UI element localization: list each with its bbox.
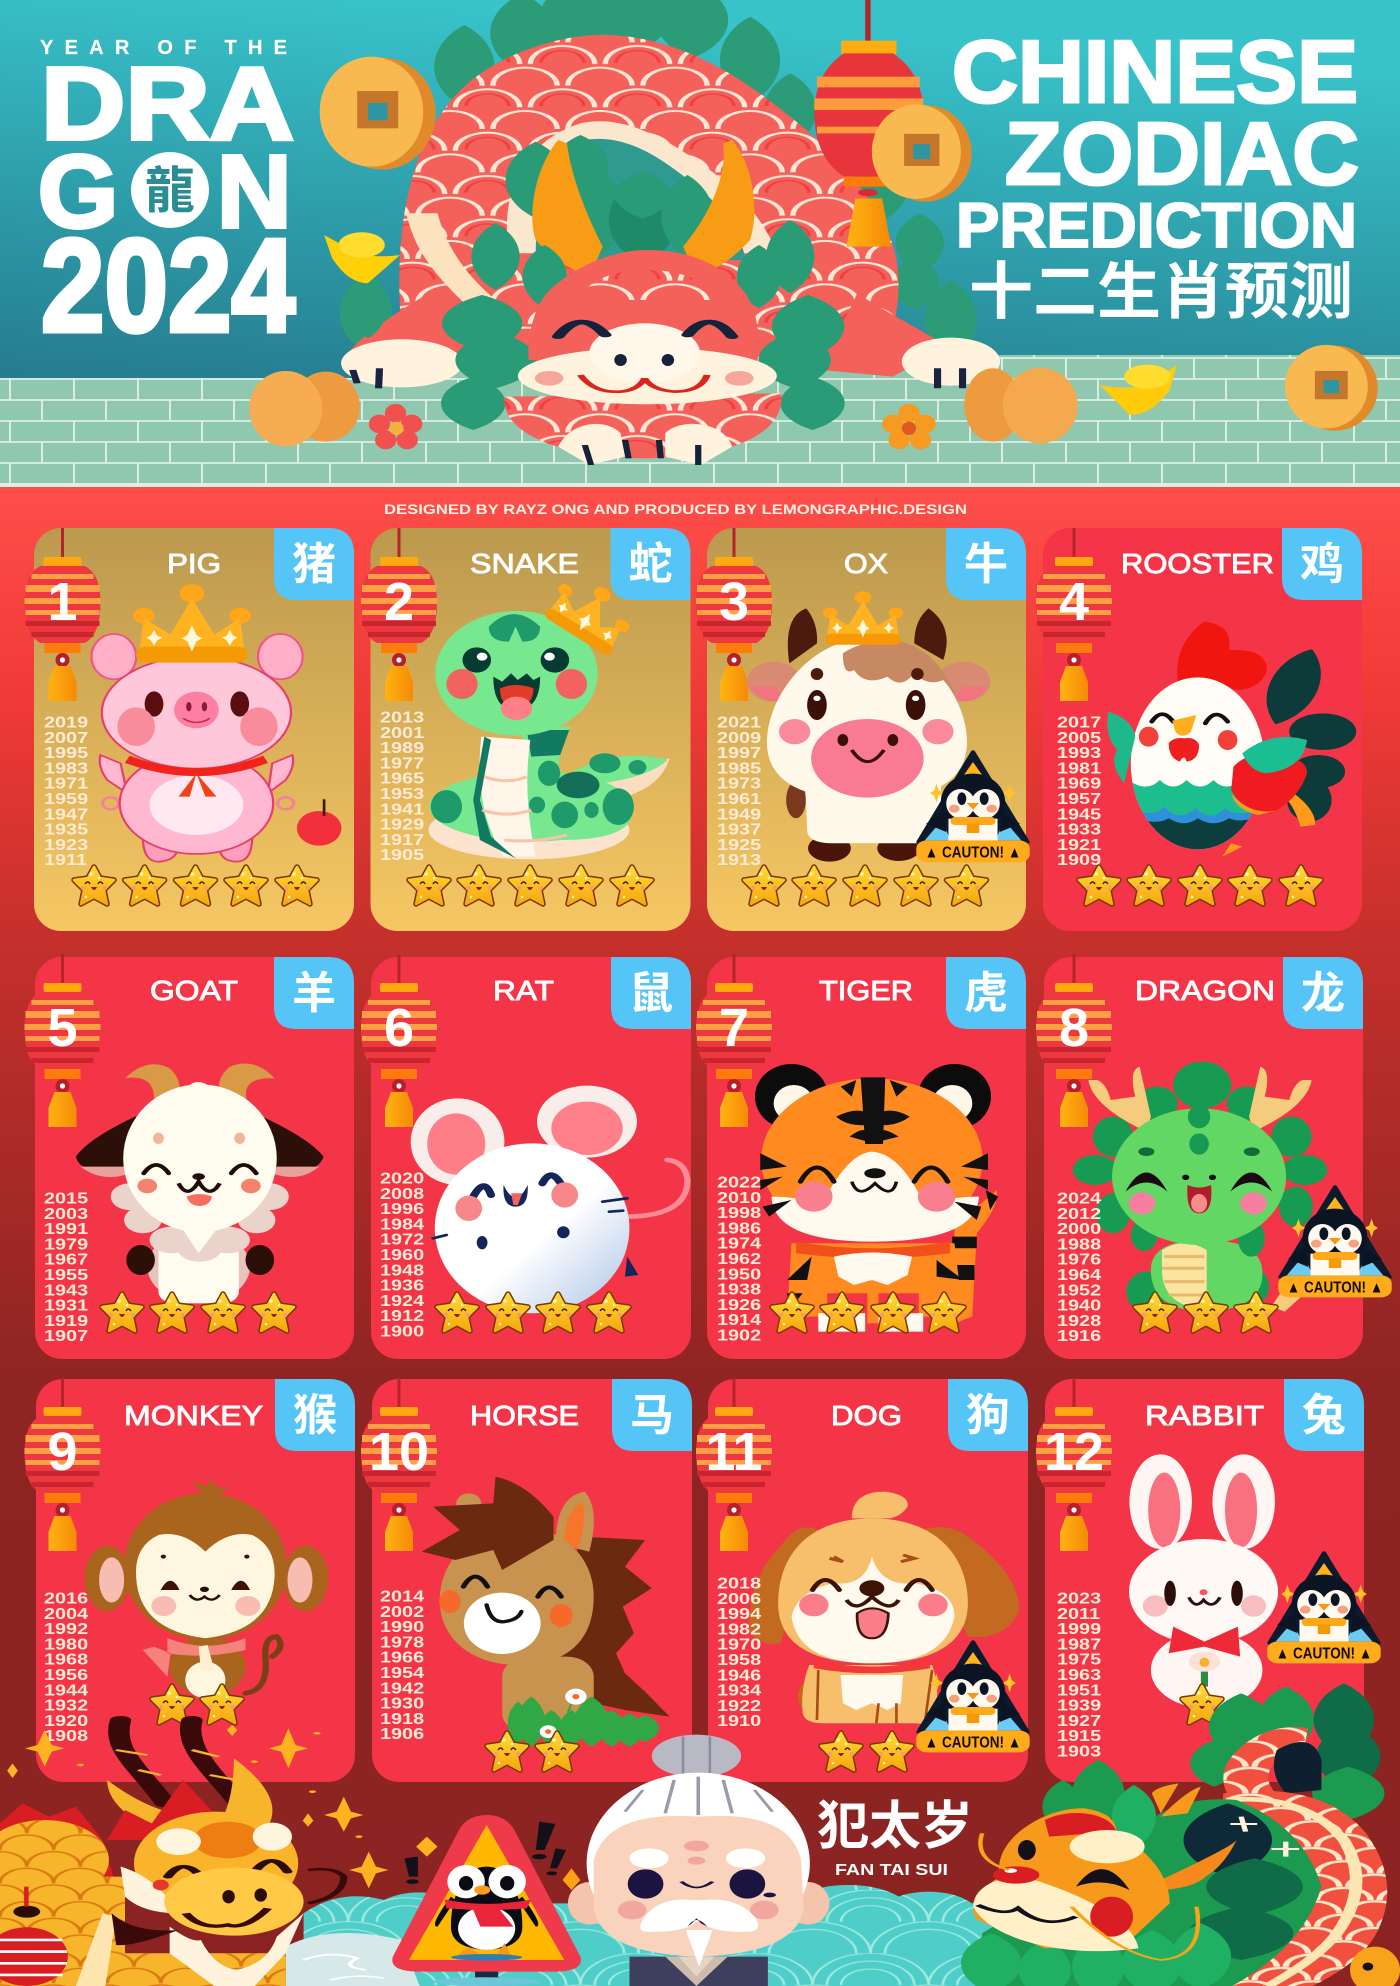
years list: 1981 bbox=[1057, 759, 1101, 777]
years list: 1911 bbox=[44, 851, 87, 869]
score stars: two bbox=[152, 1686, 242, 1723]
years list: 1908 bbox=[44, 1727, 88, 1745]
panel: card 6 rat bbox=[361, 954, 691, 1359]
years list: 1952 bbox=[1057, 1281, 1101, 1299]
years list: 1950 bbox=[717, 1265, 761, 1283]
years list: 2007 bbox=[44, 729, 88, 746]
years list: 1961 bbox=[717, 790, 761, 807]
lantern number 3: 3 bbox=[719, 572, 749, 632]
panel: card 8 dragon: 龙 bbox=[1301, 957, 1345, 1021]
panel: card 9 monkey bbox=[24, 1378, 355, 1782]
lantern number 8 bbox=[1036, 954, 1112, 1127]
years list: 1992 bbox=[44, 1620, 88, 1638]
lantern number 5: 5 bbox=[47, 998, 78, 1058]
years list: 1974 bbox=[717, 1235, 761, 1252]
icon: oranges right bbox=[964, 368, 1078, 443]
years list: 1914 bbox=[717, 1311, 761, 1329]
years list: 1969 bbox=[1057, 775, 1101, 792]
panel: card 7 tiger: TIGER bbox=[819, 975, 913, 1006]
panel: card 1 pig: PIG bbox=[167, 548, 221, 579]
icon: gold coin lower right bbox=[1285, 345, 1378, 431]
years list: 1948 bbox=[380, 1261, 424, 1279]
years list: 1947 bbox=[44, 805, 88, 823]
credit line: DESIGNED BY RAYZ ONG AND PRODUCED BY LEMONGRAPHIC.DESIGN bbox=[384, 502, 967, 517]
panel: card 6 rat: RAT bbox=[493, 975, 554, 1006]
years list: 1907 bbox=[44, 1327, 88, 1345]
dragon arched body bbox=[399, 35, 899, 367]
lantern number 2: 2 bbox=[384, 572, 414, 632]
horns bbox=[532, 140, 754, 277]
score stars: five bbox=[1079, 867, 1321, 904]
label: fan tai sui: FAN TAI SUI bbox=[835, 1862, 948, 1879]
years list: 1994 bbox=[717, 1605, 761, 1623]
panel: card 7 tiger bbox=[696, 954, 1026, 1359]
years list: 1945 bbox=[1057, 805, 1101, 823]
years list: 1966 bbox=[380, 1649, 424, 1666]
panel: card 1 pig bbox=[24, 528, 354, 931]
title: year of the dragon 2024: G bbox=[38, 134, 118, 249]
title: chinese zodiac prediction: ZODIAC bbox=[1005, 104, 1359, 203]
years list: 2004 bbox=[44, 1605, 88, 1622]
years list: 2019 bbox=[44, 714, 88, 731]
panel: card 10 horse bbox=[361, 1378, 692, 1782]
years list: 2006 bbox=[717, 1590, 761, 1607]
sparkles bbox=[7, 1725, 438, 1888]
years list: 1989 bbox=[380, 739, 424, 757]
years list: 1998 bbox=[717, 1204, 761, 1222]
panel: card 9 monkey: 猴 bbox=[293, 1379, 337, 1443]
years list: 2010 bbox=[717, 1189, 761, 1206]
years list: 1972 bbox=[380, 1231, 424, 1248]
years list: 1986 bbox=[717, 1219, 761, 1237]
years list: 1999 bbox=[1057, 1620, 1101, 1638]
panel: card 3 ox: 牛 bbox=[964, 528, 1008, 592]
years list: 1903 bbox=[1057, 1743, 1101, 1760]
years list: 1960 bbox=[380, 1246, 424, 1263]
years list: 1910 bbox=[717, 1712, 761, 1730]
years list: 1988 bbox=[1057, 1235, 1101, 1253]
years list: 1921 bbox=[1057, 836, 1101, 853]
years list: 2013 bbox=[380, 709, 424, 726]
years list: 1962 bbox=[717, 1250, 761, 1267]
years list: 1928 bbox=[1057, 1312, 1101, 1329]
icon: oranges left bbox=[249, 371, 360, 446]
title: year of the dragon 2024: 2024 bbox=[41, 212, 295, 359]
head leaves bbox=[441, 220, 845, 430]
score stars: four bbox=[772, 1294, 964, 1331]
years list: 1930 bbox=[380, 1695, 424, 1712]
years list: 1949 bbox=[717, 805, 761, 823]
panel: card 3 ox: OX bbox=[844, 548, 888, 579]
years list: 1982 bbox=[717, 1620, 761, 1638]
icon: penguin warning sign bbox=[392, 1815, 581, 1986]
icon: dragon character coin: 龍 bbox=[145, 151, 195, 223]
years list: 1995 bbox=[44, 744, 88, 762]
illustration: old man bbox=[568, 1735, 830, 1986]
years list: 1968 bbox=[44, 1651, 88, 1668]
years list: 1954 bbox=[380, 1664, 424, 1681]
years list: 1944 bbox=[44, 1681, 88, 1699]
title: chinese zodiac prediction: 十二生肖预测 bbox=[969, 241, 1353, 331]
panel: card 5 goat bbox=[24, 954, 354, 1359]
icon: snake crown bbox=[541, 567, 641, 658]
years list: 2005 bbox=[1057, 729, 1101, 746]
years list: 1973 bbox=[717, 775, 761, 792]
lantern number 1 bbox=[24, 528, 100, 701]
years list: 1905 bbox=[380, 846, 424, 864]
years list: 2021 bbox=[717, 714, 761, 731]
illustration: ox bbox=[747, 591, 990, 862]
years list: 1939 bbox=[1057, 1697, 1101, 1714]
icon: penguin caution badge: ▲ CAUTON! ▲ bbox=[925, 844, 1021, 862]
years list: 1906 bbox=[380, 1725, 424, 1743]
years list: 1932 bbox=[44, 1697, 88, 1714]
years list: 1915 bbox=[1057, 1727, 1101, 1745]
years list: 1971 bbox=[44, 775, 88, 792]
years list: 1976 bbox=[1057, 1251, 1101, 1268]
panel: card 4 rooster bbox=[1036, 528, 1362, 931]
lantern number 4: 4 bbox=[1059, 572, 1089, 632]
icon: gold ingot right bbox=[1100, 365, 1177, 415]
title: year of the dragon 2024 bbox=[38, 37, 295, 359]
years list: 2024 bbox=[1057, 1190, 1101, 1207]
panel: bottom scene fan tai sui bbox=[0, 1683, 1400, 1986]
years list: 2023 bbox=[1057, 1590, 1101, 1607]
years list: 2022 bbox=[717, 1174, 761, 1191]
panel: card 1 pig: 猪 bbox=[292, 528, 336, 592]
dragon head bbox=[504, 250, 782, 465]
illustration: rat bbox=[411, 1086, 687, 1313]
years list: 1983 bbox=[44, 759, 88, 777]
years list: 1985 bbox=[717, 759, 761, 777]
score stars: four bbox=[102, 1294, 294, 1331]
title: year of the dragon 2024: YEAR OF THE bbox=[40, 37, 287, 59]
years list: 1953 bbox=[380, 785, 424, 802]
panel: card 8 dragon: DRAGON bbox=[1135, 975, 1275, 1006]
years list: 2000 bbox=[1057, 1220, 1101, 1238]
years list: 1926 bbox=[717, 1296, 761, 1313]
icon: gold coin upper left bbox=[320, 57, 436, 170]
score stars: four bbox=[437, 1294, 629, 1331]
centre leaves bbox=[506, 135, 714, 265]
lantern number 10: 10 bbox=[369, 1422, 429, 1482]
lantern number 7: 7 bbox=[719, 998, 749, 1058]
years list: 1970 bbox=[717, 1636, 761, 1653]
years list: 2015 bbox=[44, 1190, 88, 1207]
panel: card 5 goat: 羊 bbox=[292, 957, 336, 1021]
score stars: two bbox=[487, 1733, 577, 1770]
panel: card 2 snake: 蛇 bbox=[628, 528, 672, 592]
panel: header banner bbox=[0, 0, 1400, 487]
years list: 1940 bbox=[1057, 1297, 1101, 1314]
lantern number 2 bbox=[361, 528, 437, 701]
years list: 1902 bbox=[717, 1327, 761, 1344]
panel: card 5 goat: GOAT bbox=[150, 975, 238, 1006]
panel: card 8 dragon bbox=[1036, 954, 1392, 1359]
lantern number 1: 1 bbox=[47, 572, 78, 632]
title: chinese zodiac prediction bbox=[952, 22, 1359, 331]
years list: 2001 bbox=[380, 724, 424, 741]
illustration: green and red dragon right bbox=[961, 1683, 1400, 1986]
years list: 1997 bbox=[717, 744, 761, 762]
years list: 1977 bbox=[380, 754, 424, 772]
years list: 1935 bbox=[44, 821, 88, 838]
years list: 2018 bbox=[717, 1575, 761, 1592]
years list: 1964 bbox=[1057, 1266, 1101, 1283]
dragon back leaves bbox=[340, 0, 977, 360]
score stars: five bbox=[409, 867, 652, 904]
years list: 1925 bbox=[717, 836, 761, 853]
panel: card 9 monkey: MONKEY bbox=[124, 1400, 263, 1431]
years list: 2009 bbox=[717, 729, 761, 746]
illustration: snake bbox=[429, 611, 670, 859]
years list: 1967 bbox=[44, 1251, 88, 1268]
icon: exclamation marks bbox=[404, 1822, 580, 1890]
years list: 2012 bbox=[1057, 1205, 1101, 1222]
lantern number 9: 9 bbox=[47, 1422, 78, 1482]
illustration: tiger bbox=[755, 1064, 998, 1332]
score stars: five bbox=[744, 867, 986, 904]
years list: 1933 bbox=[1057, 821, 1101, 838]
years list: 1955 bbox=[44, 1266, 88, 1283]
icon: dragon character coin bbox=[131, 151, 209, 228]
panel: card 10 horse: HORSE bbox=[470, 1400, 579, 1431]
lantern number 5 bbox=[24, 954, 100, 1127]
panel: card 3 ox bbox=[696, 528, 1030, 931]
big legs and paws bbox=[341, 293, 1000, 388]
score stars: one bbox=[1182, 1686, 1222, 1723]
icon: penguin caution badge bbox=[916, 1642, 1030, 1752]
years list: 1957 bbox=[1057, 790, 1101, 807]
illustration: golden dragon left bbox=[0, 1720, 344, 1986]
years list: 2002 bbox=[380, 1603, 424, 1620]
years list: 1936 bbox=[380, 1277, 424, 1294]
title: year of the dragon 2024: DRA bbox=[41, 46, 294, 161]
years list: 1984 bbox=[380, 1215, 424, 1233]
years list: 2016 bbox=[44, 1590, 88, 1607]
illustration: horse bbox=[422, 1477, 670, 1747]
years list: 1946 bbox=[717, 1666, 761, 1684]
icon: penguin caution badge bbox=[1278, 1187, 1392, 1297]
panel: card 11 dog: 狗 bbox=[966, 1379, 1010, 1443]
years list: 1909 bbox=[1057, 851, 1101, 869]
score stars: two bbox=[821, 1733, 912, 1770]
title: chinese zodiac prediction: PREDICTION bbox=[956, 191, 1357, 261]
score stars: five bbox=[74, 867, 317, 904]
lantern number 7 bbox=[696, 954, 772, 1127]
lantern number 8: 8 bbox=[1059, 998, 1089, 1058]
panel: card 7 tiger: 虎 bbox=[964, 957, 1008, 1021]
title: year of the dragon 2024: N bbox=[217, 134, 291, 249]
years list: 1978 bbox=[380, 1633, 424, 1651]
years list: 1965 bbox=[380, 770, 424, 787]
years list: 1941 bbox=[380, 800, 424, 818]
title: chinese zodiac prediction: CHINESE bbox=[952, 22, 1358, 121]
lantern number 12 bbox=[1036, 1378, 1112, 1551]
tiled floor bbox=[0, 355, 1400, 487]
icon: hanging lantern bbox=[814, 0, 923, 247]
years list: 1942 bbox=[380, 1679, 424, 1697]
panel: card 4 rooster: ROOSTER bbox=[1121, 548, 1274, 579]
years list: 1980 bbox=[44, 1635, 88, 1653]
years list: 1937 bbox=[717, 821, 761, 838]
years list: 1918 bbox=[380, 1710, 424, 1727]
lantern number 3 bbox=[696, 528, 772, 701]
illustration: baby dragon bbox=[1073, 1062, 1327, 1312]
label: fan tai sui: 犯太岁 bbox=[817, 1784, 973, 1859]
header sky bbox=[0, 0, 1400, 400]
years list: 1951 bbox=[1057, 1681, 1101, 1699]
years list: 1922 bbox=[717, 1697, 761, 1714]
lantern number 12: 12 bbox=[1044, 1422, 1104, 1482]
years list: 1929 bbox=[380, 816, 424, 833]
years list: 1919 bbox=[44, 1312, 88, 1329]
panel: card 10 horse: 马 bbox=[630, 1379, 674, 1443]
years list: 2011 bbox=[1057, 1605, 1100, 1622]
icon: red flower bbox=[369, 404, 422, 449]
icon: orange flower bbox=[882, 404, 936, 449]
years list: 1959 bbox=[44, 790, 88, 807]
lantern number 11 bbox=[696, 1378, 772, 1551]
years list: 1900 bbox=[380, 1323, 424, 1340]
years list: 2008 bbox=[380, 1185, 424, 1202]
icon: penguin caution badge bbox=[1267, 1553, 1381, 1663]
lantern number 6: 6 bbox=[384, 998, 414, 1058]
icon: penguin caution badge: ▲ CAUTON! ▲ bbox=[925, 1734, 1021, 1752]
years list: 1993 bbox=[1057, 744, 1101, 762]
panel: card 2 snake: SNAKE bbox=[470, 548, 579, 579]
years list: 1920 bbox=[44, 1712, 88, 1729]
panel: card 11 dog: DOG bbox=[831, 1400, 902, 1431]
illustration: monkey bbox=[85, 1478, 328, 1698]
years list: 1990 bbox=[380, 1618, 424, 1636]
panel: card 12 rabbit bbox=[1036, 1378, 1381, 1782]
waves bbox=[286, 1885, 1009, 1986]
years list: 1938 bbox=[717, 1281, 761, 1298]
years list: 1923 bbox=[44, 836, 88, 853]
illustration: big red dragon bbox=[249, 0, 1378, 465]
panel: card 12 rabbit: 兔 bbox=[1302, 1379, 1346, 1443]
years list: 1916 bbox=[1057, 1327, 1101, 1345]
years list: 1956 bbox=[44, 1666, 88, 1683]
illustration: rooster bbox=[1107, 622, 1356, 857]
illustration: goat bbox=[76, 1063, 324, 1303]
lantern number 11: 11 bbox=[705, 1422, 763, 1482]
years list: 2003 bbox=[44, 1205, 88, 1222]
panel: card 4 rooster: 鸡 bbox=[1300, 528, 1344, 592]
years list: 1912 bbox=[380, 1307, 424, 1325]
panel: card 2 snake bbox=[361, 528, 690, 931]
years list: 2017 bbox=[1057, 714, 1101, 731]
years list: 1958 bbox=[717, 1651, 761, 1668]
years list: 2020 bbox=[380, 1170, 424, 1187]
years list: 1963 bbox=[1057, 1666, 1101, 1683]
years list: 1943 bbox=[44, 1281, 88, 1299]
illustration: rabbit bbox=[1129, 1454, 1278, 1708]
lantern number 4 bbox=[1036, 528, 1112, 701]
panel: card 6 rat: 鼠 bbox=[629, 957, 673, 1021]
lantern number 6 bbox=[361, 954, 437, 1127]
lantern number 10 bbox=[361, 1378, 437, 1551]
icon: gold coin upper right bbox=[872, 104, 972, 202]
years list: 1927 bbox=[1057, 1712, 1101, 1729]
years list: 1924 bbox=[380, 1292, 424, 1309]
icon: gold ingot with plant bbox=[324, 232, 400, 338]
illustration: pig bbox=[92, 584, 341, 862]
years list: 1996 bbox=[380, 1200, 424, 1218]
panel: card 11 dog bbox=[696, 1378, 1030, 1782]
lantern number 9 bbox=[24, 1378, 100, 1551]
years list: 1979 bbox=[44, 1235, 88, 1253]
panel: card 12 rabbit: RABBIT bbox=[1145, 1400, 1264, 1431]
years list: 1934 bbox=[717, 1682, 761, 1699]
years list: 1991 bbox=[44, 1220, 88, 1238]
icon: penguin caution badge bbox=[916, 752, 1030, 862]
years list: 1987 bbox=[1057, 1635, 1101, 1653]
years list: 1913 bbox=[717, 851, 761, 869]
illustration: dog bbox=[749, 1492, 1019, 1724]
years list: 1975 bbox=[1057, 1651, 1101, 1668]
years list: 1917 bbox=[380, 831, 424, 848]
score stars: three bbox=[1135, 1294, 1276, 1331]
years list: 2014 bbox=[380, 1588, 424, 1605]
years list: 1931 bbox=[44, 1297, 88, 1314]
